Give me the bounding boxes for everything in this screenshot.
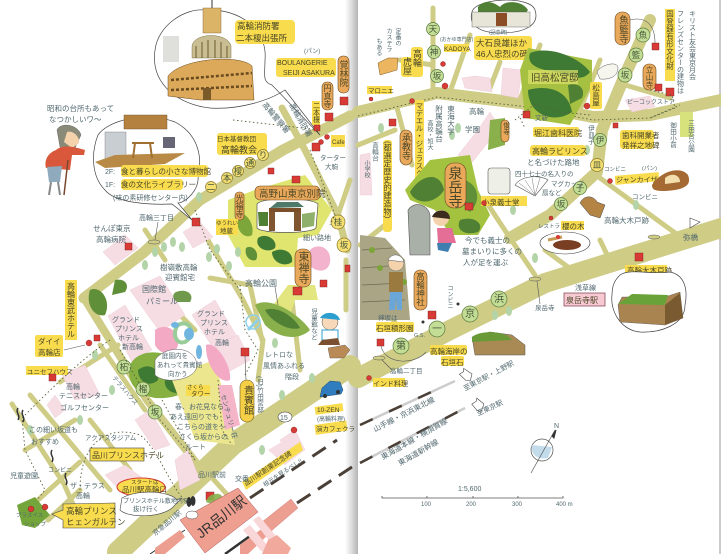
label: 10-ZEN restaurant (268, 403, 355, 465)
marker: Takanawa Okido: 高輪大木戸跡 (627, 265, 672, 275)
label: Katsura-zaka circles: 細い路地 (303, 233, 331, 242)
cafe markers: 大駒 (325, 162, 338, 171)
label: museum floors (105, 165, 211, 202)
label: Takanawa Labyrinth (527, 145, 588, 167)
label: Grand Prince Hotel New Takanawa and Pamir: 国際館 (142, 284, 166, 294)
label: bakery Boulangerie (276, 48, 336, 77)
label: Kihinkan (240, 348, 264, 422)
label: Kadoya (440, 36, 474, 89)
label: historic building (360, 140, 392, 232)
label: sakura tower: タワー (191, 389, 210, 398)
label: sakura tower (186, 384, 240, 440)
note: sakura-zaka walk: ルート (185, 444, 206, 451)
label: Gyoranji and Gyoran-zaka: 坂 (621, 70, 630, 80)
label: museum floors: 1F: (105, 182, 115, 189)
scale bar: 200 (466, 502, 477, 508)
label: Takanawa Toraya with cake (375, 27, 423, 77)
label: Grand Prince Hotel New Takanawa and Pamir: ホテル (118, 334, 139, 342)
label: Takanawa-shiki block: 迎賓館宅 (165, 272, 195, 282)
red marker and clinic label: 堀江歯科医院 (534, 128, 582, 138)
labels: Shinagawa station approach: 交番 (235, 475, 249, 483)
compass: N (554, 423, 559, 430)
road circles: Isarago-zaka: 伊 (596, 135, 605, 145)
label: Tokai University school: 東海大学 (446, 104, 456, 135)
road circles: Daiichi Keihin (393, 291, 507, 354)
walking route dotted lines (22, 120, 335, 505)
label: Jean Kaiser bakery: (パン) (642, 165, 657, 172)
scale bar: 300 (512, 502, 523, 508)
road name circles: Nihonenoki-dori: り (259, 150, 267, 160)
label: Takanawa seawall: 高輪海岸の (430, 346, 468, 356)
cafe markers: ターター (320, 153, 346, 162)
temple labels top left: 円真寺 (323, 84, 332, 108)
label: Takanawa Toraya with cake: 高輪 (412, 48, 422, 68)
start callout: プリンスホテル敷地内を (123, 497, 189, 505)
label: Unicef House (26, 366, 72, 381)
temple labels top left: 二本榎 (312, 102, 320, 124)
label: Takanawa Toraya with cake: もある (375, 38, 382, 56)
note: sakura-zaka walk: あえ遠回りでも (170, 412, 219, 421)
book gutter shadow (345, 0, 358, 554)
red marker and clinic label: 文新 (535, 113, 548, 122)
label: fire station: 高輪消防署 (237, 21, 280, 31)
park: Old Takamatsu Palace: 旧高松宮邸 (531, 72, 579, 84)
label: Oishi Yoshio memorial (474, 29, 532, 60)
pink school buildings (458, 68, 655, 165)
label: Takanawa shrine: コンビニ (446, 285, 453, 309)
label: Mita park area: 御田小前 (668, 121, 677, 149)
pink hotel blocks and gardens (47, 276, 305, 490)
label: Takanawa church: 高輪教会 (221, 144, 257, 155)
label: notes lower left: 児童遊園 (10, 471, 38, 480)
road circles: Isarago-zaka: 皿 (593, 160, 602, 170)
label: Tennis center: テニスセンター (59, 391, 108, 400)
scale bar (382, 486, 573, 508)
red marker and clinic label (515, 104, 590, 138)
label: Marronnier (367, 86, 414, 104)
label: Tokai University school (426, 104, 456, 151)
road circles: Daiichi Keihin: 浜 (494, 293, 504, 305)
label: Takanawa 2-chome and Indian food: 高輪二丁目 (390, 366, 422, 375)
label: Jean Kaiser bakery (604, 165, 689, 201)
road name circles: Nihonenoki-dori: 通 (246, 158, 255, 168)
rail lines: Yamanote: 東海道本線・横須賀線 (379, 415, 449, 462)
white note bubble: Garden route (155, 349, 203, 380)
scale bar: 400 m (556, 502, 573, 508)
label: Gyoranji and Gyoran-zaka (615, 12, 659, 82)
label: Takanawa 2-chome and Indian food: インド料理 (373, 379, 408, 388)
label: notes lower left: コンビニ (48, 466, 72, 474)
label: Tennis center: ゴルフセンター (60, 403, 109, 412)
note: Friends Center: 国登録有形文化財 (665, 10, 674, 70)
label: Gyoranji and Gyoran-zaka: 籃 (632, 50, 641, 60)
illustration: boy and dog: 児童館など (310, 307, 318, 341)
illustration: mug and fan: 四十七士の名入りの (515, 169, 574, 178)
label: Tennis center: 高輪 (66, 382, 80, 391)
label: Kofukuji and Yurei Jizo: ゆうれい (216, 220, 239, 227)
cafe markers: Cafe (332, 140, 345, 146)
label: Takanawa-shiki block (160, 262, 198, 282)
label: bakery Boulangerie: (パン) (304, 48, 320, 55)
label: 10-ZEN restaurant: 演カフェクラ (316, 424, 355, 433)
label: museum floors: 食と暮らしの小さな博物館 (121, 166, 211, 176)
label: Katsura-zaka circles: 坂 (340, 240, 349, 250)
label: retro stairs: レトロな (265, 351, 293, 359)
station: JR Shinagawa (180, 488, 258, 553)
label: dentist monument (613, 123, 660, 150)
label: Kofukuji and Yurei Jizo: 光福寺 (235, 193, 244, 218)
label: Tateyama temple (627, 64, 675, 106)
label: Tateyama temple: ピーコックストア (627, 99, 675, 106)
tracks near station (150, 440, 352, 554)
label: Grand Prince Hotel New Takanawa and Pamir: プリンス (115, 325, 143, 333)
label: Takanawa-shiki block: 樹嶺敷高輪 (160, 262, 198, 272)
label: Kihinkan: (旧)竹田宮邸 (256, 376, 264, 414)
icon: blue car (320, 381, 343, 398)
label: dentist monument: 歯科開業者 (622, 130, 660, 140)
note: sakura-zaka walk: さくら坂からの (179, 433, 228, 441)
labels: police and fire stations (260, 100, 315, 139)
arrows: to Tokyo and Ueno: 至東京駅・上野駅 (462, 359, 515, 393)
green garden with markers: ショップ (24, 521, 47, 528)
label: retro stairs (246, 315, 305, 381)
right page edge (719, 0, 721, 554)
white note bubble: Garden route: 庭園内を (162, 351, 188, 360)
label: Oishi Yoshio memorial: 46人忠烈の碑 (476, 49, 528, 59)
note: Friends Center: フレンズセンターの建物は (676, 10, 684, 94)
road name circles: Nihonenoki-dori (206, 150, 268, 192)
character: grandmother (45, 103, 114, 195)
label: Takanawa Labyrinth: と名づけた路地 (527, 157, 580, 167)
marker: Takanawa Okido (625, 253, 672, 275)
label: retro stairs: 階段 (285, 372, 299, 381)
label and building: Sempo Takanawa Hospital (93, 223, 138, 265)
label: bakery Boulangerie: SEIJI ASAKURA (283, 70, 335, 77)
label: Takanawa Okido crossing and arrow (604, 215, 700, 242)
label: Takanawa 3-chome crossing (139, 213, 174, 244)
label: historic building: 高輪台 (370, 141, 379, 163)
label: Takanawa Tobu Hotel (65, 280, 100, 346)
label: Takanawa church (217, 133, 274, 174)
road circles: Daiichi Keihin: 京 (465, 308, 475, 320)
label: Takanawa Labyrinth: 高輪ラビリンス (532, 146, 588, 156)
label: Tennis center (59, 382, 109, 412)
label: Tokai University school: 附属高輪台 (434, 105, 444, 144)
arrows: to Tokyo and Ueno: 至東京駅 (475, 398, 504, 418)
label: Gyoranji and Gyoran-zaka: 魚籃寺 (617, 14, 629, 44)
icon: kitchen speech bubble (94, 115, 200, 220)
park and label: Sengakuji: 泉岳寺 (448, 165, 464, 208)
label: historic building: 小学校 (363, 159, 370, 179)
label: Takanawa Prince Hyen Garten (52, 503, 126, 528)
label: museum floors: 2F: (105, 169, 115, 176)
roads: right page (358, 8, 721, 378)
road circles: Daiichi Keihin: 第 (396, 339, 406, 352)
road circles: Tenjin-zaka: 天 (429, 24, 438, 34)
illustration: mug and fan (488, 168, 584, 197)
label: Daiei Takanawa: 高輪店 (38, 347, 61, 357)
temple labels top left (312, 56, 349, 125)
label: stone wall park: 神坂は (378, 313, 398, 322)
road name circles: Nihonenoki-dori: 榎 (234, 166, 243, 176)
label: Takanawa 3-chome crossing: 高輪三丁目 (139, 213, 174, 222)
label: Grand Prince Hotel New Takanawa and Pamir: パミール (146, 297, 178, 306)
platforms: station buildings (155, 499, 298, 554)
label: Takanawa Toraya with cake: 定番の (394, 27, 401, 46)
label: Takanawa shrine (414, 270, 460, 319)
scale bar: 1:5,600 (458, 486, 481, 493)
road circles: Kashiwa-zaka: テラスハウス (110, 374, 140, 407)
label: Sengakuji station and Okido: 泉岳寺駅 (566, 295, 598, 305)
label: Jean Kaiser bakery: ジャンカイザー (616, 176, 665, 184)
label: bakery Boulangerie: BOULANGERIE (277, 60, 328, 67)
label: Daiei Takanawa (35, 335, 85, 357)
label: restaurant and plate: 櫻の木 (562, 221, 585, 231)
road name circles: Nihonenoki-dori: 二 (207, 182, 216, 192)
label: 10-ZEN restaurant: 10-ZEN (317, 407, 340, 414)
temple labels top left: 覚林院 (338, 59, 348, 88)
label: Katsura-zaka circles: 桂 (334, 217, 343, 227)
label: sakura tower: センチュリー荘 (219, 393, 240, 440)
label: Onodera shrine (481, 196, 527, 207)
label: Kofukuji and Yurei Jizo: 地蔵 (220, 226, 234, 235)
label: Mainichi gelateria (389, 100, 424, 192)
road circles: Tenjin-zaka: 坂 (433, 71, 442, 81)
label: Takanawa seawall (430, 332, 525, 367)
illustration: Okido stone wall bubble (612, 272, 686, 332)
label: Mita park area: 三田台公園 (686, 120, 695, 154)
label: Jean Kaiser bakery: コンビニ (604, 165, 626, 173)
label: Shinagawa station monument: 根元を見るべし!! (262, 456, 304, 489)
road circles: Kashiwa-zaka: 榴 (139, 384, 148, 394)
note: sakura-zaka walk (170, 402, 228, 451)
compass (531, 423, 559, 473)
label: notes lower left (10, 408, 78, 485)
route number 15: 15 (280, 415, 288, 422)
label: stone wall park: 石垣積形園 (376, 323, 414, 333)
rail lines: Yamanote: 東海道新幹線 (396, 436, 440, 468)
label: Mainichi gelateria: マデエル・ジェラスクリア (415, 102, 424, 192)
label: Takanawa Okido crossing and arrow: 高輪大木戸跡 (604, 215, 649, 225)
park: Koyasan temple grounds (228, 175, 332, 267)
label: Grand Prince Hotel New Takanawa and Pamir: グランド (197, 309, 225, 318)
label: The Terrace Takanawa: 高輪 (76, 491, 90, 500)
note: sakura-zaka walk: こちらの道を〜 (177, 422, 226, 431)
label: Gyoranji and Gyoran-zaka: 魚 (639, 30, 648, 40)
label: Takanawa Prince Hyen Garten: 高輪プリンス (66, 506, 117, 516)
illustration: Sengakuji gate (471, 0, 536, 33)
character: grandmother: 昭和の台所もあって (47, 103, 114, 113)
labels: Takanawa Park and neighbouring (245, 278, 310, 337)
label: Grand Prince Hotel New Takanawa and Pamir: 新高輪 (122, 342, 143, 351)
label and building: Sempo Takanawa Hospital: 高輪病院 (96, 234, 126, 244)
road circles: Kashiwa-zaka: 柘 (120, 362, 129, 372)
character: grandmother: なつかしいワ〜 (49, 115, 102, 124)
label: Takanawa shrine: 高輪神社 (416, 271, 426, 307)
label: historic building: (都選定歴史的建造物) (383, 141, 392, 219)
label: Takanawa seawall: 石垣石 (441, 357, 464, 367)
label: Takanawa Okido crossing and arrow: 弥橋 (683, 232, 698, 242)
illustration: boy and dog (310, 307, 350, 358)
route number 15 (278, 412, 292, 422)
start callout (117, 478, 189, 516)
label: fire station: 二本榎出張所 (236, 33, 288, 43)
trees scattered (27, 123, 639, 455)
label: Marronnier: マロニエ (368, 87, 394, 95)
park and label: Sengakuji: 俊寺 (502, 121, 510, 135)
road name circles: Nihonenoki-dori: 本 (223, 173, 232, 183)
note: sakura-zaka walk: 春、お花見なら (175, 402, 224, 411)
start callout: 抜け行く (133, 504, 159, 513)
label: Takanawa Toraya with cake: 虎屋 (402, 56, 412, 76)
label: Koyasan Tokyo Betsuin: 高野山東京別院 (259, 188, 326, 200)
park: Old Takamatsu Palace (520, 48, 592, 125)
label: Grand Prince Hotel New Takanawa and Pamir (112, 284, 229, 351)
park and label: Sengakuji (405, 118, 510, 235)
label: Takanawa 2-chome and Indian food (366, 356, 422, 388)
label: Grand Prince Hotel New Takanawa and Pamir: ホテル (204, 328, 225, 336)
label: Matsushimaya (584, 64, 618, 109)
label: Grand Prince Hotel New Takanawa and Pamir: プリンス (200, 319, 228, 327)
label: Oishi Yoshio memorial: (記念碑) (489, 29, 508, 36)
note: visitors: 墓まいりに多くの (462, 246, 522, 256)
label: Takanawa Tobu Hotel: 高輪東武ホテル (66, 281, 76, 338)
pink flowers and Tozenji (262, 246, 350, 330)
label: Grand Prince Hotel New Takanawa and Pamir: 高輪 (215, 338, 229, 347)
label: The Terrace Takanawa (70, 482, 105, 500)
illustration: stone wall and hiker (360, 235, 410, 320)
building: Shokunoshinkan red marker and pink block (183, 218, 213, 248)
label: Mita park area (650, 90, 695, 154)
label: Takanawa Toraya with cake: カステラ (385, 28, 392, 52)
roads: left page (12, 108, 350, 552)
labels: Shinagawa station approach (151, 470, 249, 538)
green garden with markers: ブラスイス (16, 511, 43, 519)
label: Daiei Takanawa: ダイイ (38, 336, 60, 346)
label: Shinagawa Prince Hotel: アクアスタジアム (85, 433, 137, 442)
road circles: Isarago-zaka (554, 124, 606, 210)
label: museum floors: 食の文化ライブラリー (121, 179, 196, 189)
label: Tateyama temple: 立山寺 (645, 65, 654, 89)
road circles: Daiichi Keihin: 一 (432, 324, 442, 335)
label: Jean Kaiser bakery: コンビニ (632, 192, 658, 201)
road circles: Kashiwa-zaka: 坂 (151, 407, 160, 417)
road circles: Isarago-zaka: 子 (576, 183, 585, 193)
labels: Takanawa Park and neighbouring: 高輪公園 (245, 278, 277, 288)
arrows: to Tokyo and Ueno (458, 359, 515, 418)
label: notes lower left: おすすめ (31, 438, 59, 446)
note: Friends Center (665, 9, 696, 94)
marker: red square near Keihin (377, 339, 426, 361)
start callout: スタートは (131, 478, 159, 486)
white note bubble: Garden route: あれって貴賓館 (157, 360, 203, 369)
label: Sengakuji station and Okido (529, 277, 605, 312)
label: Shinagawa Prince Hotel (85, 433, 164, 461)
label: 10-ZEN restaurant: (高輪料理) (317, 415, 345, 423)
illustration: mug and fan: マグカップ (551, 179, 584, 188)
label: museum floors: (味の素研修センター内) (113, 193, 188, 202)
label: Shinagawa station monument (206, 442, 304, 503)
rail lines: Yamanote (360, 381, 465, 468)
station: JR Shinagawa: JR品川駅 (193, 492, 249, 541)
label: Shokyoji (400, 130, 412, 165)
label: Onodera shrine: 小泉義士堂 (482, 197, 520, 207)
label: stone wall park (376, 313, 425, 339)
rail lines: Yamanote: 山手線・京浜東北線 (371, 394, 436, 434)
road circles: Kashiwa-zaka (110, 360, 162, 419)
label and building: Sempo Takanawa Hospital: せんぽ東京 (93, 223, 131, 233)
labels: police and fire stations: 高輪消防署 (287, 101, 315, 139)
label: Kihinkan: 貴賓館 (242, 384, 254, 416)
label: Kofukuji and Yurei Jizo (216, 192, 244, 235)
illustration: cat (580, 197, 605, 218)
label: Sengakuji station and Okido: 浅草線 (575, 283, 596, 292)
label: Shokyoji: 承教寺 (401, 133, 411, 160)
white note bubble: Garden route: 向かう (168, 369, 188, 378)
note: visitors: 今でも義士の (465, 235, 510, 245)
label: The Terrace Takanawa: ザ・テラス (70, 482, 105, 490)
label: notes lower left: この細い坂道も (29, 425, 78, 434)
cafe markers (312, 125, 346, 171)
label: stone wall park: G.S. (414, 333, 425, 339)
pink flowers and Tozenji: 東禅寺 (297, 251, 310, 284)
label: Takanawa Prince Hyen Garten: ヒェンガルテン (66, 517, 126, 527)
label: dentist monument: 発祥之地碑 (622, 140, 660, 150)
label: Kadoya: (おかゆ専門店) (440, 36, 474, 43)
label: Shinagawa station monument: 品川駅創業記念碑 (242, 449, 294, 488)
green garden with markers (16, 497, 50, 528)
label: retro stairs: 風情あふれる (263, 361, 305, 370)
label: Takanawa Gakuen: 学園 (465, 124, 480, 134)
label: Oishi Yoshio memorial: 大石良雄ほか (476, 38, 528, 48)
icon: fire station speech bubble (154, 0, 320, 135)
start callout: 品川駅高輪口 (122, 484, 167, 494)
road circles: Tenjin-zaka (426, 22, 444, 82)
illustration: girl at stone (408, 205, 456, 255)
label: Takanawa Gakuen (465, 106, 484, 134)
label: Grand Prince Hotel New Takanawa and Pamir: グランド (112, 315, 140, 324)
note: Friends Center: キリスト友会東京月会 (688, 10, 696, 81)
note: visitors: 人が足を運ぶ (463, 257, 508, 267)
label: Sengakuji station and Okido: 泉岳寺 (535, 303, 555, 312)
label: Kadoya: KADOYA (444, 46, 471, 53)
note: visitors (462, 235, 522, 267)
label: Takanawa church: 日本基督教団 (217, 134, 256, 143)
labels: police and fire stations: 高輪警察署 (260, 100, 293, 135)
label: Takanawa Gakuen: 高輪 (469, 106, 484, 116)
label: Shinagawa Prince Hotel: 品川プリンスホテル (92, 451, 164, 460)
label: Matsushimaya: 松島屋 (591, 83, 600, 108)
labels: Shinagawa station approach: 京急品川駅 (151, 508, 183, 538)
road circles: Tenjin-zaka: 神 (430, 47, 438, 57)
label: restaurant and plate: レストラン (538, 223, 566, 230)
scale bar: 100 (421, 502, 432, 508)
label: fire station (235, 20, 295, 44)
illustration: mug and fan: 扇など (542, 189, 562, 197)
labels: Shinagawa station approach: 品川駅前 (198, 470, 226, 479)
label: Koyasan Tokyo Betsuin (255, 176, 326, 200)
label: sakura tower: さくら (187, 384, 204, 391)
road circles: Isarago-zaka: 伊皿子 (586, 124, 595, 146)
label: Katsura-zaka circles (303, 215, 351, 252)
road circles: Isarago-zaka: 坂 (557, 199, 566, 209)
label: Unicef House: ユニセフハウス (27, 368, 72, 376)
label: Tokai University school: 高校・短大 (426, 119, 433, 151)
label: restaurant and plate (538, 216, 590, 254)
